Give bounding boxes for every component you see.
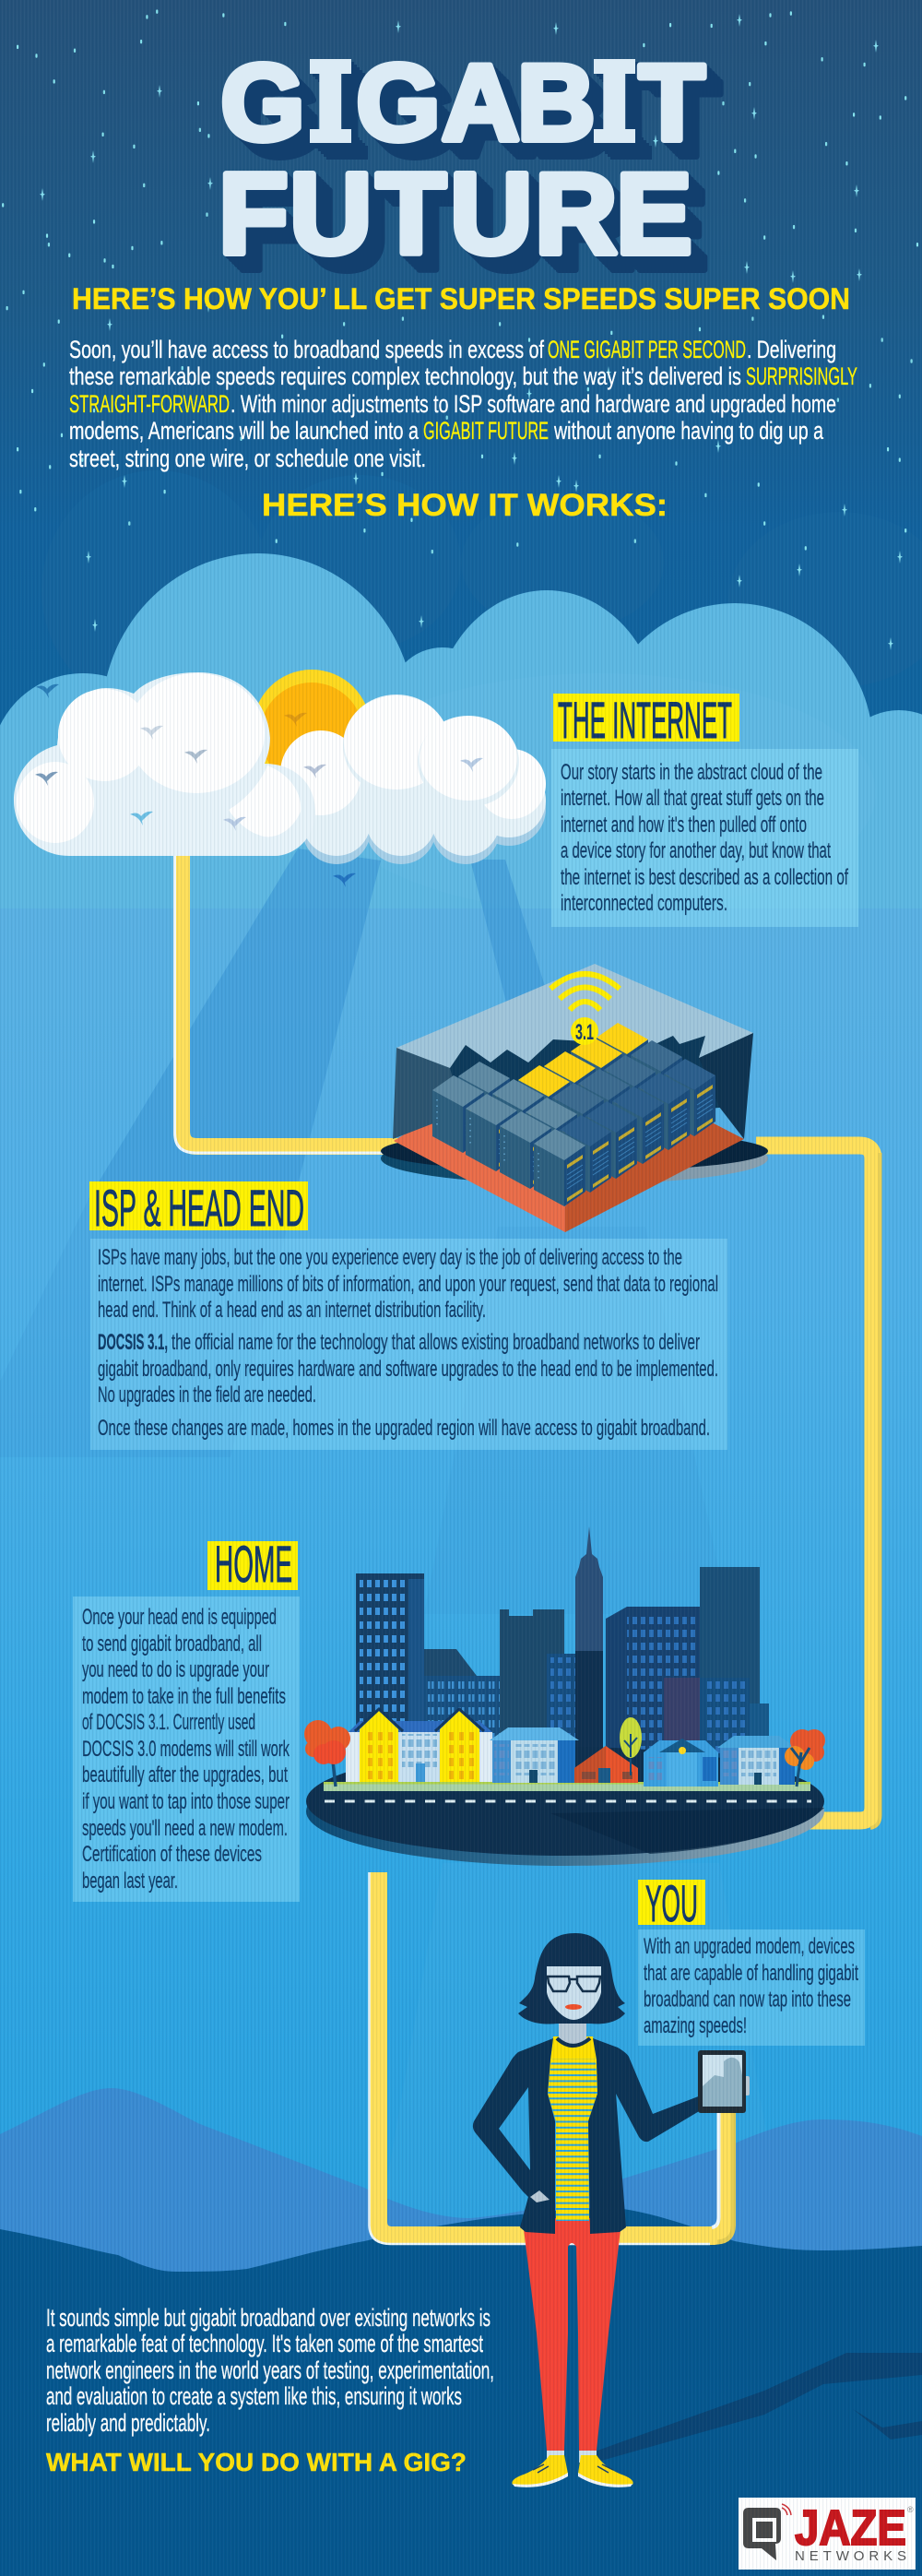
panel: home text <box>73 1597 300 1902</box>
striped shirt <box>548 2036 597 2221</box>
illustration: woman with tablet <box>473 1933 750 2487</box>
interior back wall <box>396 996 753 1123</box>
connector pipe: ISP to home <box>756 1146 873 1821</box>
panel: you text <box>638 1929 865 2046</box>
logo: Jaze Networks: NETWORKS <box>795 2548 906 2564</box>
intro paragraph: Soon, you’ll have access to broadband speeds in excess of <box>69 336 544 363</box>
pants <box>524 2218 621 2451</box>
panel: ISP text: DOCSIS 3.1, <box>98 1330 168 1355</box>
left cloud highlights <box>17 673 301 843</box>
illustration: city on floating disc <box>304 1526 825 1866</box>
faint background clouds <box>41 470 922 710</box>
illustration: ISP head end server room <box>381 964 768 1232</box>
icon: trees <box>304 1717 825 1787</box>
panel: you text: amazing speeds! <box>644 2013 747 2038</box>
birds <box>35 684 483 887</box>
heading: you <box>638 1874 705 1932</box>
closing paragraph: network engineers in the world years of testing, experimentation, <box>46 2356 494 2384</box>
panel: home text: Certification of these devices <box>82 1842 262 1867</box>
panel: home text: beautifully after the upgrades, but <box>82 1763 288 1787</box>
light rays <box>0 849 784 2232</box>
closing call to action: WHAT WILL YOU DO WITH A GIG? <box>46 2448 467 2476</box>
closing paragraph <box>46 2304 494 2437</box>
badge: DOCSIS 3.1: 3.1 <box>575 1020 594 1045</box>
houses row <box>346 1709 797 1787</box>
skyline <box>356 1526 769 1777</box>
connector pipe: cloud to ISP <box>182 853 424 1146</box>
panel: home text: began last year. <box>82 1869 178 1893</box>
collar <box>557 2038 590 2046</box>
panel: home text: speeds you'll need a new modem. <box>82 1816 288 1841</box>
face <box>547 1966 601 2020</box>
hair <box>518 1933 625 2024</box>
white cloud <box>14 672 546 864</box>
intro paragraph: ONE GIGABIT PER SECOND <box>548 336 746 363</box>
connector pipe highlight <box>175 853 424 1153</box>
heading: you: YOU <box>645 1874 698 1932</box>
mountains: back range <box>0 2088 922 2306</box>
logo: Jaze Networks <box>739 2498 916 2570</box>
title: Gigabit Future <box>219 42 704 279</box>
road dashes <box>325 1800 811 1802</box>
closing paragraph: and evaluation to create a system like this, ensuring it works <box>46 2382 462 2410</box>
heading: how it works: HERE’S HOW IT WORKS: <box>262 488 668 523</box>
intro paragraph: without anyone having to dig up a <box>553 417 824 445</box>
intro paragraph <box>69 336 857 472</box>
panel: the internet text <box>551 749 858 927</box>
right cloud highlights <box>280 694 546 819</box>
road disc surface <box>306 1747 824 1856</box>
roof glass <box>396 964 753 1068</box>
stars <box>3 10 917 650</box>
figure ground shadow <box>582 2353 922 2464</box>
logo: Jaze Networks: JAZE <box>795 2500 906 2556</box>
disc shadow <box>550 1808 824 1854</box>
panel: home text: Once your head end is equipped <box>82 1605 277 1630</box>
lower sky gradient <box>0 908 922 2347</box>
sun <box>253 670 371 788</box>
heading: home: HOME <box>215 1535 292 1593</box>
intro paragraph: STRAIGHT-FORWARD <box>69 390 230 418</box>
grass strip <box>324 1782 810 1791</box>
tablet <box>698 2050 750 2113</box>
panel: the internet text: interconnected computers. <box>561 891 727 916</box>
night sky background <box>0 0 922 756</box>
icon: wifi signal <box>550 974 620 1010</box>
right cloud body <box>302 756 546 856</box>
intro paragraph: GIGABIT FUTURE <box>423 417 549 445</box>
panel: ISP text <box>90 1239 727 1450</box>
panel: home text: you need to do is upgrade your <box>82 1657 269 1682</box>
pale sky cloud backdrop <box>0 553 922 913</box>
panel: ISP text: No upgrades in the field are needed. <box>98 1383 316 1407</box>
right wall <box>699 1033 753 1139</box>
heading: ISP and head end <box>89 1179 308 1237</box>
server racks <box>432 1023 715 1206</box>
logo: Jaze Networks: ® <box>907 2505 914 2514</box>
jacket <box>473 2038 701 2234</box>
panel: ISP text: head end. Think of a head end as an internet distribution facility. <box>98 1298 486 1323</box>
shoes <box>512 2455 633 2487</box>
lips <box>565 2004 582 2010</box>
road disc rim <box>306 1757 824 1866</box>
right cloud shadow <box>302 772 546 864</box>
intro paragraph: . Delivering <box>747 336 836 363</box>
heading: the internet <box>553 691 739 749</box>
shadow disc <box>381 1133 768 1184</box>
hand on hip <box>530 2190 550 2202</box>
neck <box>559 2011 586 2046</box>
socks <box>547 2451 597 2463</box>
glasses <box>548 1977 600 1991</box>
heading: ISP and head end: ISP & HEAD END <box>94 1179 304 1237</box>
closing paragraph: a remarkable feat of technology. It's taken some of the smartest <box>46 2330 483 2357</box>
platform <box>394 1088 565 1232</box>
title: Gigabit Future: FUTURE <box>219 151 692 279</box>
panel: home text: to send gigabit broadband, all <box>82 1632 262 1656</box>
connector pipe shades <box>369 1153 880 2244</box>
left cloud body <box>14 672 315 856</box>
title: Gigabit Future: GIGABIT <box>221 42 704 162</box>
mountains: foreground ground <box>0 2208 922 2576</box>
panel: home text: of DOCSIS 3.1. Currently used <box>82 1710 255 1735</box>
badge: DOCSIS 3.1 <box>571 1017 598 1045</box>
panel: home text: if you want to tap into those super <box>82 1789 290 1814</box>
intro paragraph: modems, Americans will be launched into a <box>69 417 420 445</box>
heading: home <box>207 1535 298 1593</box>
panel: home text: DOCSIS 3.0 modems will still work <box>82 1737 290 1762</box>
panel: home text: modem to take in the full benefits <box>82 1684 286 1709</box>
closing paragraph: It sounds simple but gigabit broadband over existing networks is <box>46 2304 491 2332</box>
left wall <box>393 1048 461 1139</box>
closing paragraph: reliably and predictably. <box>46 2409 210 2437</box>
subtitle: HERE’S HOW YOU’ LL GET SUPER SPEEDS SUPER SOON <box>72 282 850 315</box>
connector pipe: home to you <box>378 1872 727 2236</box>
intro paragraph: street, string one wire, or schedule one visit. <box>69 445 426 472</box>
